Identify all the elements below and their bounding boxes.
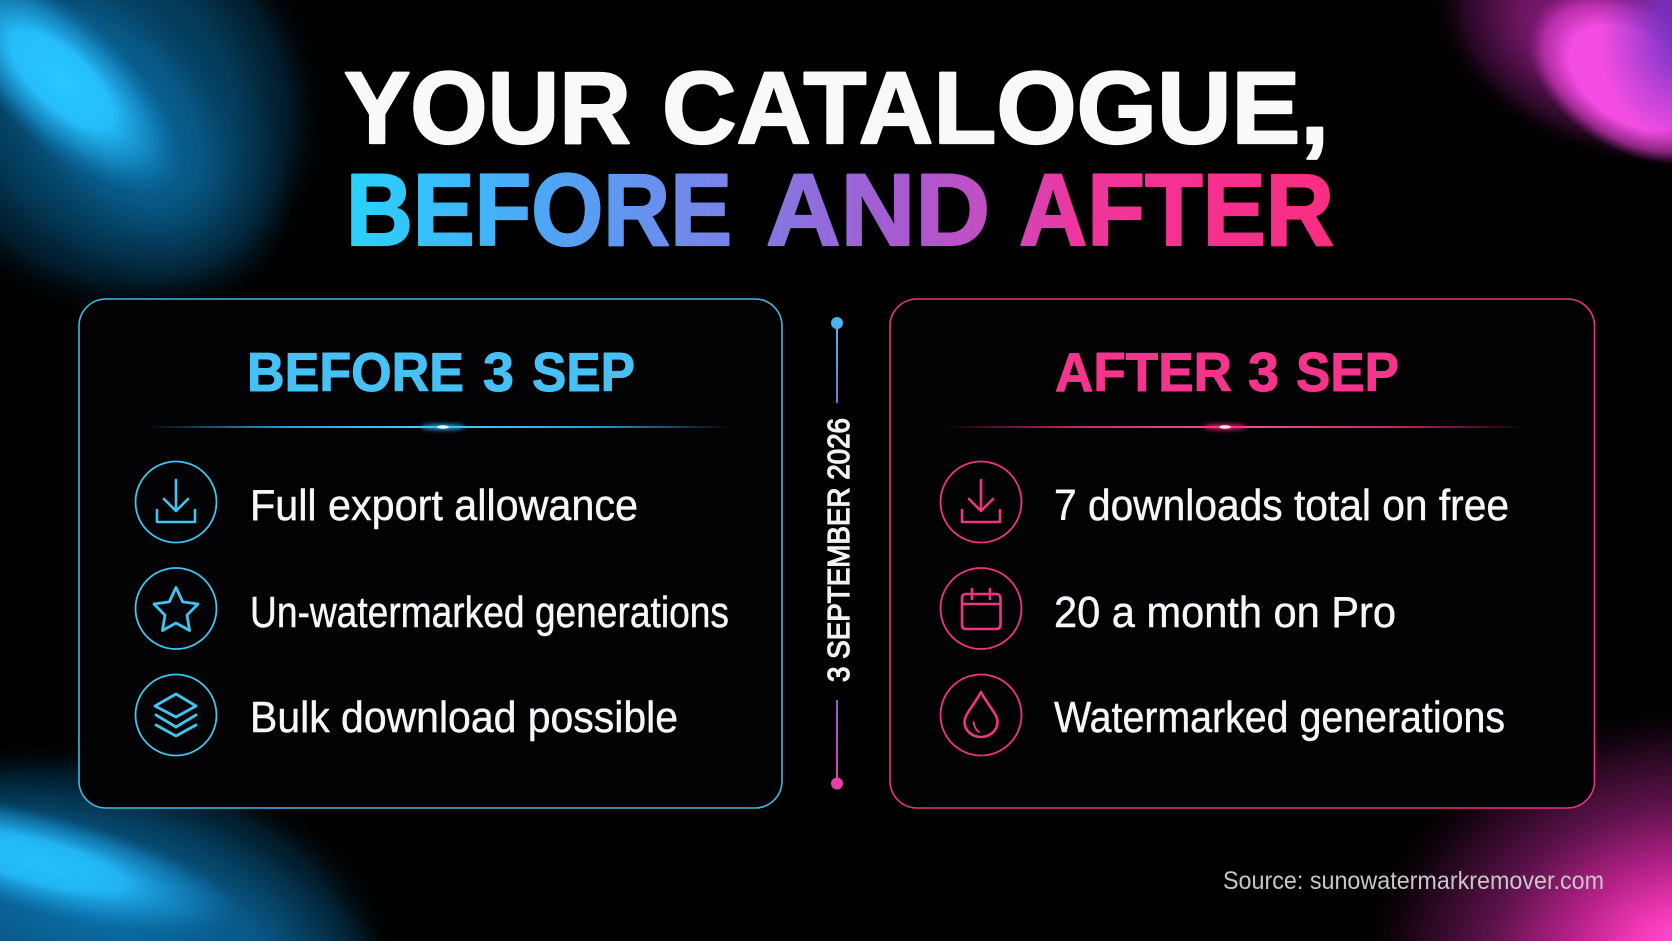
icon: download (after) bbox=[940, 462, 1022, 542]
glow: bottom right bbox=[1330, 680, 1672, 941]
heading: before: BEFORE bbox=[247, 341, 464, 403]
panel: before bbox=[79, 299, 782, 808]
source credit: Source: sunowatermarkremover.com bbox=[1223, 867, 1604, 895]
timeline bottom dot bbox=[831, 778, 843, 790]
text: full export allowance: Full export allowance bbox=[250, 481, 638, 530]
glow: top right bbox=[1380, 0, 1672, 210]
text: watermarked generations: Watermarked generations bbox=[1054, 693, 1505, 742]
timeline upper line bbox=[836, 323, 838, 403]
glow: bottom left bbox=[0, 730, 420, 941]
icon: download (before) bbox=[136, 462, 216, 542]
text: un-watermarked generations: Un-watermarked generations bbox=[250, 588, 729, 637]
timeline top dot bbox=[831, 317, 843, 329]
divider: before bbox=[145, 424, 732, 430]
text: 7 downloads total on free: 7 downloads total on free bbox=[1054, 481, 1509, 530]
heading: after: AFTER bbox=[1055, 341, 1232, 403]
heading: after bbox=[1055, 341, 1399, 403]
glow: top left bbox=[0, 0, 360, 360]
text: 20 a month on pro: 20 a month on Pro bbox=[1054, 588, 1396, 637]
icon: star bbox=[136, 568, 216, 649]
text: bulk download possible: Bulk download possible bbox=[250, 693, 678, 742]
divider: after bbox=[945, 424, 1527, 430]
title line 1: CATALOGUE, bbox=[662, 51, 1329, 165]
icon: calendar bbox=[940, 568, 1022, 649]
panel: after bbox=[890, 299, 1594, 808]
heading: after: 3 bbox=[1248, 341, 1279, 403]
title line 2 bbox=[346, 153, 1334, 267]
title line 2: BEFORE bbox=[346, 153, 732, 267]
heading: before bbox=[247, 341, 635, 403]
timeline lower line bbox=[836, 700, 838, 784]
title line 2: AND bbox=[766, 153, 990, 267]
heading: before: SEP bbox=[532, 341, 635, 403]
title line 1 bbox=[344, 51, 1329, 165]
title line 1: YOUR bbox=[344, 51, 631, 165]
date label: 3 SEPTEMBER 2026 bbox=[821, 418, 856, 682]
title line 2: AFTER bbox=[1019, 153, 1334, 267]
heading: after: SEP bbox=[1296, 341, 1399, 403]
heading: before: 3 bbox=[483, 341, 514, 403]
title bbox=[344, 51, 1334, 267]
icon: water drop bbox=[940, 674, 1022, 756]
icon: layers bbox=[136, 674, 216, 756]
timeline bbox=[821, 317, 856, 790]
